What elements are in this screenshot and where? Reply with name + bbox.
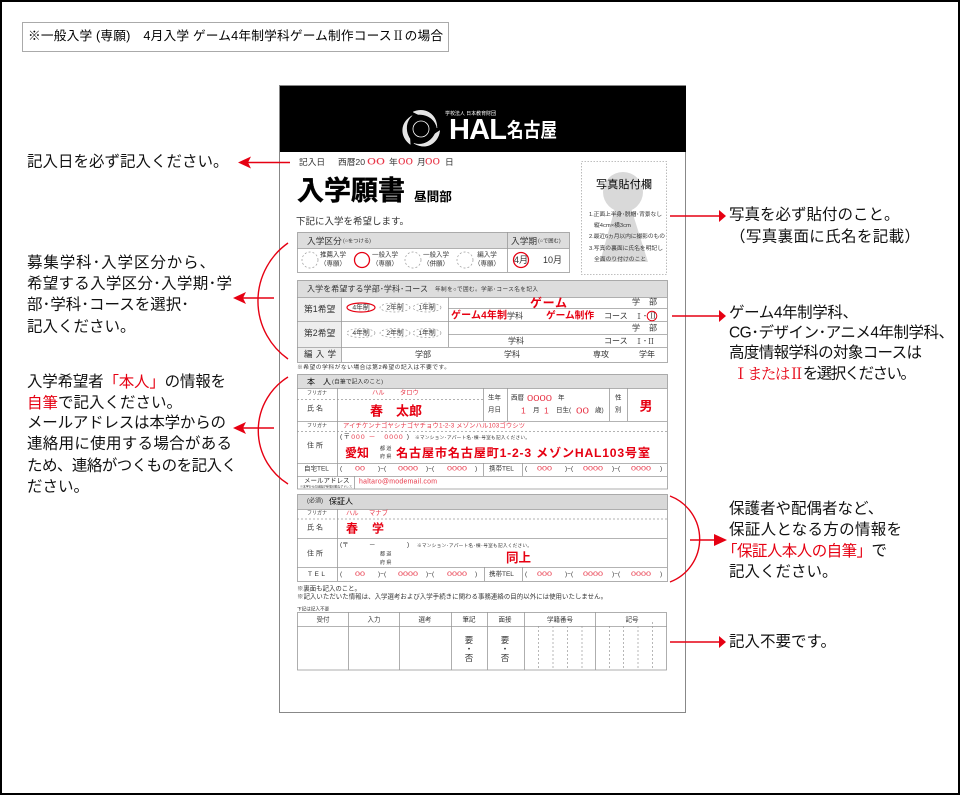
callout: guarantor: 「保証人本人の自筆」で: [722, 542, 887, 560]
section: desired department and course: 学科: [508, 336, 524, 346]
callout: photo: 写真を必ず貼付のこと。: [729, 206, 900, 224]
section: applicant details: タロウ: [400, 388, 419, 396]
form header band with logo: 名古屋: [507, 119, 557, 141]
form header band with logo: [280, 86, 686, 152]
section: applicant details: 愛知: [345, 445, 369, 460]
section: applicant details: ※マンション･アパート名･棟･号室も記入ください。: [415, 434, 530, 441]
section: applicant details: 携帯TEL: [489, 464, 514, 472]
callout: applicant handwriting: 自筆で記入ください。: [27, 394, 182, 412]
callout: course selection: CG･デザイン･アニメ4年制学科、: [729, 322, 954, 342]
callout: guarantor: 保護者や配偶者など、: [729, 500, 883, 518]
section: applicant details: 0000: [398, 466, 418, 472]
section: applicant details: [297, 374, 668, 489]
entry date line: 00: [398, 156, 413, 168]
section: applicant details: 生年: [488, 392, 502, 402]
pills: years of study: 1年制: [418, 328, 436, 337]
callout: department selection: 記入ください。: [27, 318, 136, 336]
entry date line: 00: [425, 156, 440, 168]
section: guarantor details: 氏 名: [307, 522, 323, 532]
section: applicant details: 0000: [583, 466, 603, 472]
section: guarantor details: [297, 494, 668, 582]
section: guarantor details: )−(: [378, 571, 387, 578]
section: desired department and course: 学科: [504, 349, 520, 359]
section: admission type and term: (○をつける): [343, 238, 371, 244]
section: guarantor details: )−(: [612, 571, 621, 578]
section: guarantor details: )−(: [426, 571, 435, 578]
photo box: 全面のり付けのこと: [594, 255, 646, 263]
entry date line: 00: [367, 156, 385, 168]
bracket arrow: department selection: [233, 243, 288, 359]
table: office use only: 選考: [418, 614, 432, 624]
section: applicant details: )−(: [565, 466, 574, 472]
section: admission type and term: 入学期: [511, 235, 537, 246]
panel: application form: [280, 86, 686, 712]
section: applicant details: 00: [576, 406, 589, 416]
section: applicant details: 別: [615, 404, 622, 414]
section: guarantor details: 同上: [506, 551, 531, 565]
section: admission type and term: 10月: [543, 255, 562, 265]
table: office use only: ・: [501, 644, 509, 654]
form title: 入学願書: [297, 176, 405, 206]
arrow: to entry date: [238, 156, 290, 168]
callout: department selection: 希望する入学区分･入学期･学: [27, 274, 232, 292]
section: applicant details: 月: [533, 406, 540, 414]
photo box: 3.写真の裏面に氏名を明記し: [589, 244, 663, 252]
section: guarantor details: 携帯TEL: [489, 569, 514, 578]
icon: photo silhouette: [600, 172, 648, 262]
section: applicant details: メールアドレス: [304, 476, 350, 484]
section: admission type and term: 入学区分: [307, 235, 342, 246]
pills: years of study: 2年制: [386, 302, 404, 312]
photo box: [582, 162, 666, 274]
section: desired department and course: ゲーム4年制: [451, 308, 507, 322]
photo box: 縦4cm×横3cm: [594, 221, 631, 229]
section: applicant details: 太郎: [396, 404, 422, 418]
section: guarantor details: (〒: [340, 542, 349, 548]
arrow: from photo box: [670, 210, 726, 222]
section: desired department and course: 入学を希望する学部･学科･コース: [307, 284, 428, 294]
section: desired department and course: ゲーム制作: [546, 308, 594, 322]
section: desired department and course: 学部: [415, 349, 431, 359]
callout: applicant handwriting: ださい。: [27, 478, 89, 496]
section: applicant details: 1: [521, 406, 526, 416]
section: applicant details: haltaro@modemail.com: [359, 478, 437, 486]
section: desired department and course: Ⅰ･: [635, 312, 647, 320]
section: applicant details: (〒000 － 0000 ): [340, 434, 409, 440]
section: applicant details: 本 人: [307, 376, 331, 386]
caption box: example case: ※一般入学 (専願) 4月入学 ゲーム4年制学科ゲーム制作コースⅡの場合: [28, 28, 443, 43]
table: office use only: 否: [501, 653, 510, 663]
form header band with logo: 学校法人 日本教育財団: [445, 110, 496, 117]
section: guarantor details: ハル: [346, 510, 359, 517]
section: guarantor details: (: [525, 571, 528, 578]
section: applicant details: 0000: [631, 466, 651, 472]
office-use label: 下記は記入不要: [297, 606, 330, 612]
section: applicant details: フリガナ: [307, 390, 327, 396]
section: applicant details: 性: [615, 392, 622, 402]
section: desired department and course: Ⅰ･Ⅱ: [635, 336, 655, 346]
section: desired department and course: ゲーム: [530, 295, 567, 310]
section: applicant details: ※本学からの連絡が受信可能なアドレス: [300, 484, 352, 488]
section: admission type and term: （専願）: [474, 258, 500, 268]
section: guarantor details: 00: [355, 571, 365, 578]
callout: applicant handwriting: [27, 372, 288, 496]
section: guarantor details: 0000: [398, 571, 418, 578]
form title: 昼間部: [414, 189, 452, 204]
section: admission type and term: （併願）: [423, 258, 449, 268]
section: desired department and course: 部: [649, 324, 657, 332]
section: desired department and course: 専攻: [593, 349, 609, 359]
pills: years of study: 1年制: [418, 302, 436, 312]
section: desired department and course: 年制を○で囲む。学部･コース名を記入: [435, 285, 538, 293]
section: guarantor details: 0000: [447, 571, 467, 578]
callout: applicant handwriting: ため、連絡がつくものを記入く: [27, 456, 237, 474]
table: office use only: 要: [465, 635, 474, 645]
caption box: example case: [22, 22, 448, 52]
notes under guarantor: [297, 584, 607, 600]
section: applicant details: 月日: [488, 406, 501, 414]
table: office use only: ・: [465, 644, 473, 654]
notes under guarantor: ※裏面も記入のこと。: [297, 584, 361, 592]
form title: [297, 176, 452, 206]
section: desired department and course: 部: [649, 298, 657, 306]
section: applicant details: 西暦: [511, 394, 524, 402]
arrow: from course row: [672, 310, 726, 322]
callout: course selection: ゲーム4年制学科、: [729, 304, 858, 322]
section: desired department and course: コース: [604, 312, 628, 320]
form header band with logo: HAL: [449, 114, 507, 146]
section: guarantor details: ): [407, 542, 409, 548]
photo box: 写真貼付欄: [596, 177, 652, 191]
section: guarantor details: T E L: [308, 571, 325, 578]
section: desired department and course: 第2希望: [304, 327, 335, 338]
callout: department selection: [27, 243, 288, 359]
bracket arrow: guarantor section: [670, 496, 727, 582]
section: guarantor details: 住 所: [307, 548, 323, 558]
callout: not required: 記入不要です。: [729, 632, 836, 650]
entry date line: 日: [445, 157, 454, 167]
section: applicant details: 000: [537, 466, 552, 472]
section: applicant details: ): [475, 466, 477, 472]
section: admission type and term: 推薦入学: [320, 250, 346, 258]
callout: entry date: 記入日を必ず記入ください。: [27, 152, 229, 170]
section: guarantor details: マナブ: [369, 508, 389, 517]
table: office use only: 学籍番号: [547, 614, 574, 624]
section: applicant details: 春: [370, 404, 383, 418]
section: applicant details: 00: [355, 466, 365, 472]
section: admission type and term: [297, 232, 570, 272]
bracket arrow: applicant section: [233, 377, 288, 484]
callout: applicant handwriting: 入学希望者「本人」の情報を: [27, 372, 226, 390]
table: office use only: 記号: [626, 616, 639, 624]
section: applicant details: ハル: [372, 390, 385, 396]
section: applicant details: 日生(: [556, 405, 572, 414]
callout: guarantor: 保証人となる方の情報を: [729, 520, 902, 538]
section: applicant details: 1: [544, 406, 549, 416]
icon: HAL swirl logo: [397, 110, 441, 152]
notes under guarantor: ※記入いただいた情報は、入学選考および入学手続きに関わる事務連絡の目的以外には使用いたしません。: [297, 592, 607, 600]
section: applicant details: アイチケンナゴヤシナゴヤチョウ1-2-3 メゾンハル103ゴウシツ: [343, 420, 525, 430]
section: applicant details: 自宅TEL: [304, 464, 329, 472]
pills: years of study: [347, 302, 441, 338]
section: desired department and course: 学: [632, 296, 640, 306]
callout: department selection: 部･学科･コースを選択･: [27, 296, 189, 314]
section: guarantor details: 0000: [631, 571, 651, 578]
section: applicant details: 年: [558, 392, 565, 402]
table: office use only: 筆記: [462, 614, 476, 624]
photo box: 1.正面上半身･脱帽･背景なし: [589, 210, 662, 218]
callout: not required: [670, 632, 836, 650]
section: guarantor details: 府 県: [380, 560, 391, 566]
section: admission type and term: 編入学: [477, 250, 497, 258]
table: office use only: [297, 612, 667, 670]
section: applicant details: 男: [639, 398, 653, 414]
section: guarantor details: (: [340, 571, 343, 578]
section: desired department and course: コース: [604, 336, 628, 346]
pills: years of study: 4年制: [352, 302, 370, 312]
callout: applicant handwriting: メールアドレスは本学からの: [27, 414, 226, 432]
section: applicant details: (: [340, 466, 343, 472]
section: admission type and term: 4月: [514, 255, 528, 265]
section: guarantor details: 000: [537, 571, 552, 578]
table: office use only: 受付: [316, 614, 330, 624]
section: desired department and course: 学年: [639, 349, 655, 359]
callout: course selection: ⅠまたはⅡを選択ください。: [733, 364, 916, 382]
entry date line: 年: [389, 156, 398, 167]
entry date line: 月: [417, 157, 426, 167]
section: applicant details: 都 道: [380, 445, 391, 452]
section: applicant details: 0000: [447, 466, 467, 472]
entry date line: [299, 156, 454, 168]
section: guarantor details: ): [660, 571, 662, 578]
section: applicant details: 住 所: [307, 440, 323, 450]
section: admission type and term: （専願）: [372, 258, 398, 268]
section: applicant details: )−(: [378, 466, 387, 472]
section: desired department and course: [297, 280, 668, 362]
table: office use only: 入力: [368, 614, 380, 624]
callout: course selection: [672, 304, 954, 382]
section: applicant details: 歳): [595, 405, 604, 414]
table: office use only: 面接: [498, 614, 512, 624]
section: guarantor details: 春: [346, 520, 358, 536]
section: applicant details: フリガナ: [307, 422, 327, 429]
entry date line: 記入日: [299, 157, 325, 167]
section: guarantor details: )−(: [565, 571, 574, 578]
section: guarantor details: ※マンション･アパート名･棟･号室も記入ください。: [417, 542, 532, 549]
form intro text: 下記に入学を希望します。: [296, 216, 409, 228]
entry date line: 西暦20: [338, 157, 365, 167]
section: desired department and course: 第1希望: [304, 303, 335, 314]
section: applicant details: (: [525, 466, 528, 472]
section: admission type and term: 一般入学: [423, 250, 450, 258]
pills: years of study: 2年制: [386, 328, 404, 337]
section: applicant details: 名古屋市名古屋町1-2-3 メゾンHAL103号室: [396, 445, 650, 460]
section: admission type and term: (○で囲む): [538, 238, 561, 244]
callout: course selection: 高度情報学科の対象コースは: [729, 344, 922, 362]
section: guarantor details: フリガナ: [307, 510, 327, 516]
section: desired department and course: Ⅱ: [649, 312, 657, 320]
section: applicant details: )−(: [426, 466, 435, 472]
section: desired department and course: 学科: [507, 310, 523, 320]
section: guarantor details: ): [475, 571, 477, 578]
callout: photo: （写真裏面に氏名を記載）: [730, 228, 920, 246]
callout: department selection: 募集学科･入学区分から、: [27, 254, 215, 272]
section: admission type and term: （専願）: [320, 258, 346, 268]
section: guarantor details: 都 道: [380, 550, 391, 558]
table: office use only: 要: [501, 635, 510, 645]
section: applicant details: 0000: [527, 393, 552, 403]
section: applicant details: 氏 名: [307, 404, 323, 412]
section: admission type and term: 一般入学: [372, 250, 398, 258]
section: applicant details: ): [660, 466, 662, 472]
section: guarantor details: (必須): [307, 496, 323, 504]
section: guarantor details: 0000: [583, 571, 603, 578]
section: applicant details: )−(: [612, 466, 621, 472]
pills: years of study: 4年制: [352, 328, 370, 337]
section: desired department and course: 学: [632, 322, 640, 332]
section: desired department and course: 編 入 学: [304, 349, 336, 359]
section: guarantor details: －: [369, 542, 376, 548]
note: second choice: ※希望の学科がない場合は第2希望の記入は不要です。: [297, 363, 450, 371]
section: applicant details: (自筆で記入のこと): [332, 378, 383, 386]
table: office use only: 否: [465, 653, 474, 663]
section: applicant details: 府 県: [380, 454, 391, 460]
callout: guarantor: 記入ください。: [729, 562, 838, 580]
section: guarantor details: 保証人: [329, 496, 353, 506]
callout: guarantor: [670, 496, 902, 582]
callout: applicant handwriting: 連絡用に使用する場合がある: [27, 434, 232, 452]
arrow: from office-use table: [670, 636, 726, 648]
section: guarantor details: 学: [372, 520, 384, 536]
callout: photo: [670, 206, 920, 246]
photo box: 2.最近6ヵ月以内に撮影のもの: [589, 232, 665, 240]
